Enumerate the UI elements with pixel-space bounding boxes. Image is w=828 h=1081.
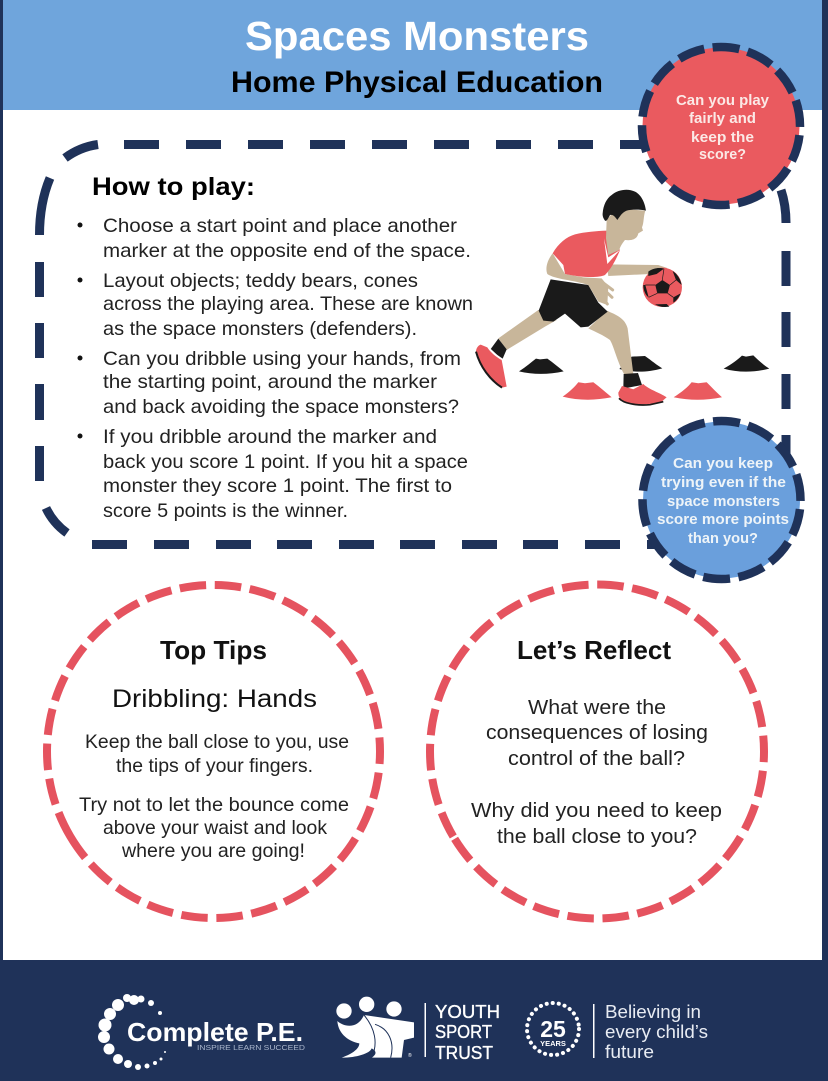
- text block: how to play instructions: [78, 215, 473, 522]
- back cones: [519, 355, 769, 374]
- shirt: [553, 231, 620, 277]
- text block: how to play instructions: If you dribble around the marker and: [103, 426, 437, 448]
- text block: how to play instructions: monster they score 1 point. The first to: [103, 475, 452, 497]
- illustration: boy dribbling a ball between cones: [476, 190, 769, 405]
- logo: Youth Sport Trust: YOUTH: [435, 1001, 500, 1022]
- logo: Complete P.E.: INSPIRE LEARN SUCCEED: [197, 1045, 305, 1052]
- text block: how to play instructions: across the playing area. These are known: [103, 293, 473, 315]
- text block: how to play instructions: Can you dribble using your hands, from: [103, 348, 461, 370]
- logo: Youth Sport Trust: ®: [408, 1052, 412, 1059]
- tagline: future: [605, 1041, 654, 1062]
- header band: [0, 0, 828, 110]
- arms and hands: [607, 264, 667, 276]
- logo: 25 years: 25: [540, 1016, 566, 1042]
- callout: keep trying: space monsters: [667, 494, 780, 510]
- text block: reflection questions: consequences of losing: [486, 721, 708, 744]
- text block: how to play instructions: Choose a start point and place another: [103, 215, 458, 237]
- text block: how to play instructions: back you score 1 point. If you hit a space: [103, 451, 468, 473]
- front leg: [588, 311, 633, 374]
- text block: reflection questions: [471, 696, 722, 848]
- text block: how to play instructions: and back avoiding the space monsters?: [103, 396, 459, 418]
- text block: top tips advice: the tips of your fingers.: [116, 755, 313, 777]
- logo: 25 years: YEARS: [540, 1039, 566, 1048]
- shorts: [539, 279, 608, 327]
- tagline: Believing in: [605, 1001, 701, 1022]
- logo: Youth Sport Trust: [336, 997, 500, 1063]
- callout: keep trying: [634, 412, 809, 588]
- callout: fair play: Can you play: [676, 93, 769, 109]
- callout: fair play: keep the: [691, 130, 754, 146]
- text block: top tips advice: [79, 731, 349, 862]
- heading: top tips: Top Tips: [160, 635, 267, 665]
- text block: reflection questions: control of the ball?: [508, 747, 685, 770]
- callout: fair play: fairly and: [689, 111, 756, 127]
- logo: Complete P.E.: [98, 994, 305, 1070]
- front cones: [563, 382, 722, 400]
- logo: 25 years: [527, 1003, 594, 1058]
- title: [231, 13, 603, 99]
- head and neck: [606, 208, 645, 255]
- panel: how to play dashed frame: [40, 144, 786, 544]
- tagline: every child’s: [605, 1021, 708, 1042]
- callout: keep trying: trying even if the: [661, 475, 786, 491]
- text block: top tips advice: Keep the ball close to you, use: [85, 731, 349, 753]
- tagline: [605, 1001, 708, 1062]
- football: [643, 268, 682, 307]
- title: Spaces Monsters: [245, 13, 589, 59]
- text block: reflection questions: the ball close to you?: [497, 825, 697, 848]
- logo: Youth Sport Trust: SPORT: [435, 1021, 492, 1042]
- text block: top tips advice: Try not to let the bounce come: [79, 794, 349, 816]
- text block: how to play instructions: the starting point, around the marker: [103, 371, 438, 393]
- callout: fair play: score?: [699, 147, 746, 163]
- text block: reflection questions: Why did you need to keep: [471, 799, 722, 822]
- text block: how to play instructions: marker at the opposite end of the space.: [103, 240, 471, 262]
- text block: how to play instructions: score 5 points is the winner.: [103, 500, 348, 522]
- callout: keep trying: than you?: [688, 531, 758, 547]
- callout: keep trying: Can you keep: [673, 456, 773, 472]
- footer band: [0, 960, 828, 1081]
- panel: let's reflect: [368, 523, 826, 980]
- text block: how to play instructions: as the space monsters (defenders).: [103, 318, 417, 340]
- heading: how to play: How to play:: [92, 173, 255, 201]
- logo: Complete P.E.: Complete P.E.: [127, 1017, 303, 1047]
- panel: top tips: [0, 523, 442, 980]
- text block: reflection questions: What were the: [528, 696, 666, 719]
- text block: how to play instructions: Layout objects; teddy bears, cones: [103, 270, 418, 292]
- callout: fair play: [633, 38, 809, 214]
- logo: Youth Sport Trust: TRUST: [435, 1042, 493, 1063]
- text block: top tips advice: above your waist and look: [103, 817, 327, 839]
- heading: let's reflect: Let’s Reflect: [517, 635, 671, 665]
- text block: top tips advice: where you are going!: [121, 840, 305, 862]
- back leg: [498, 310, 557, 350]
- title: Home Physical Education: [231, 66, 603, 99]
- subheading: dribbling hands: Dribbling: Hands: [112, 685, 317, 713]
- callout: keep trying: score more points: [657, 512, 789, 528]
